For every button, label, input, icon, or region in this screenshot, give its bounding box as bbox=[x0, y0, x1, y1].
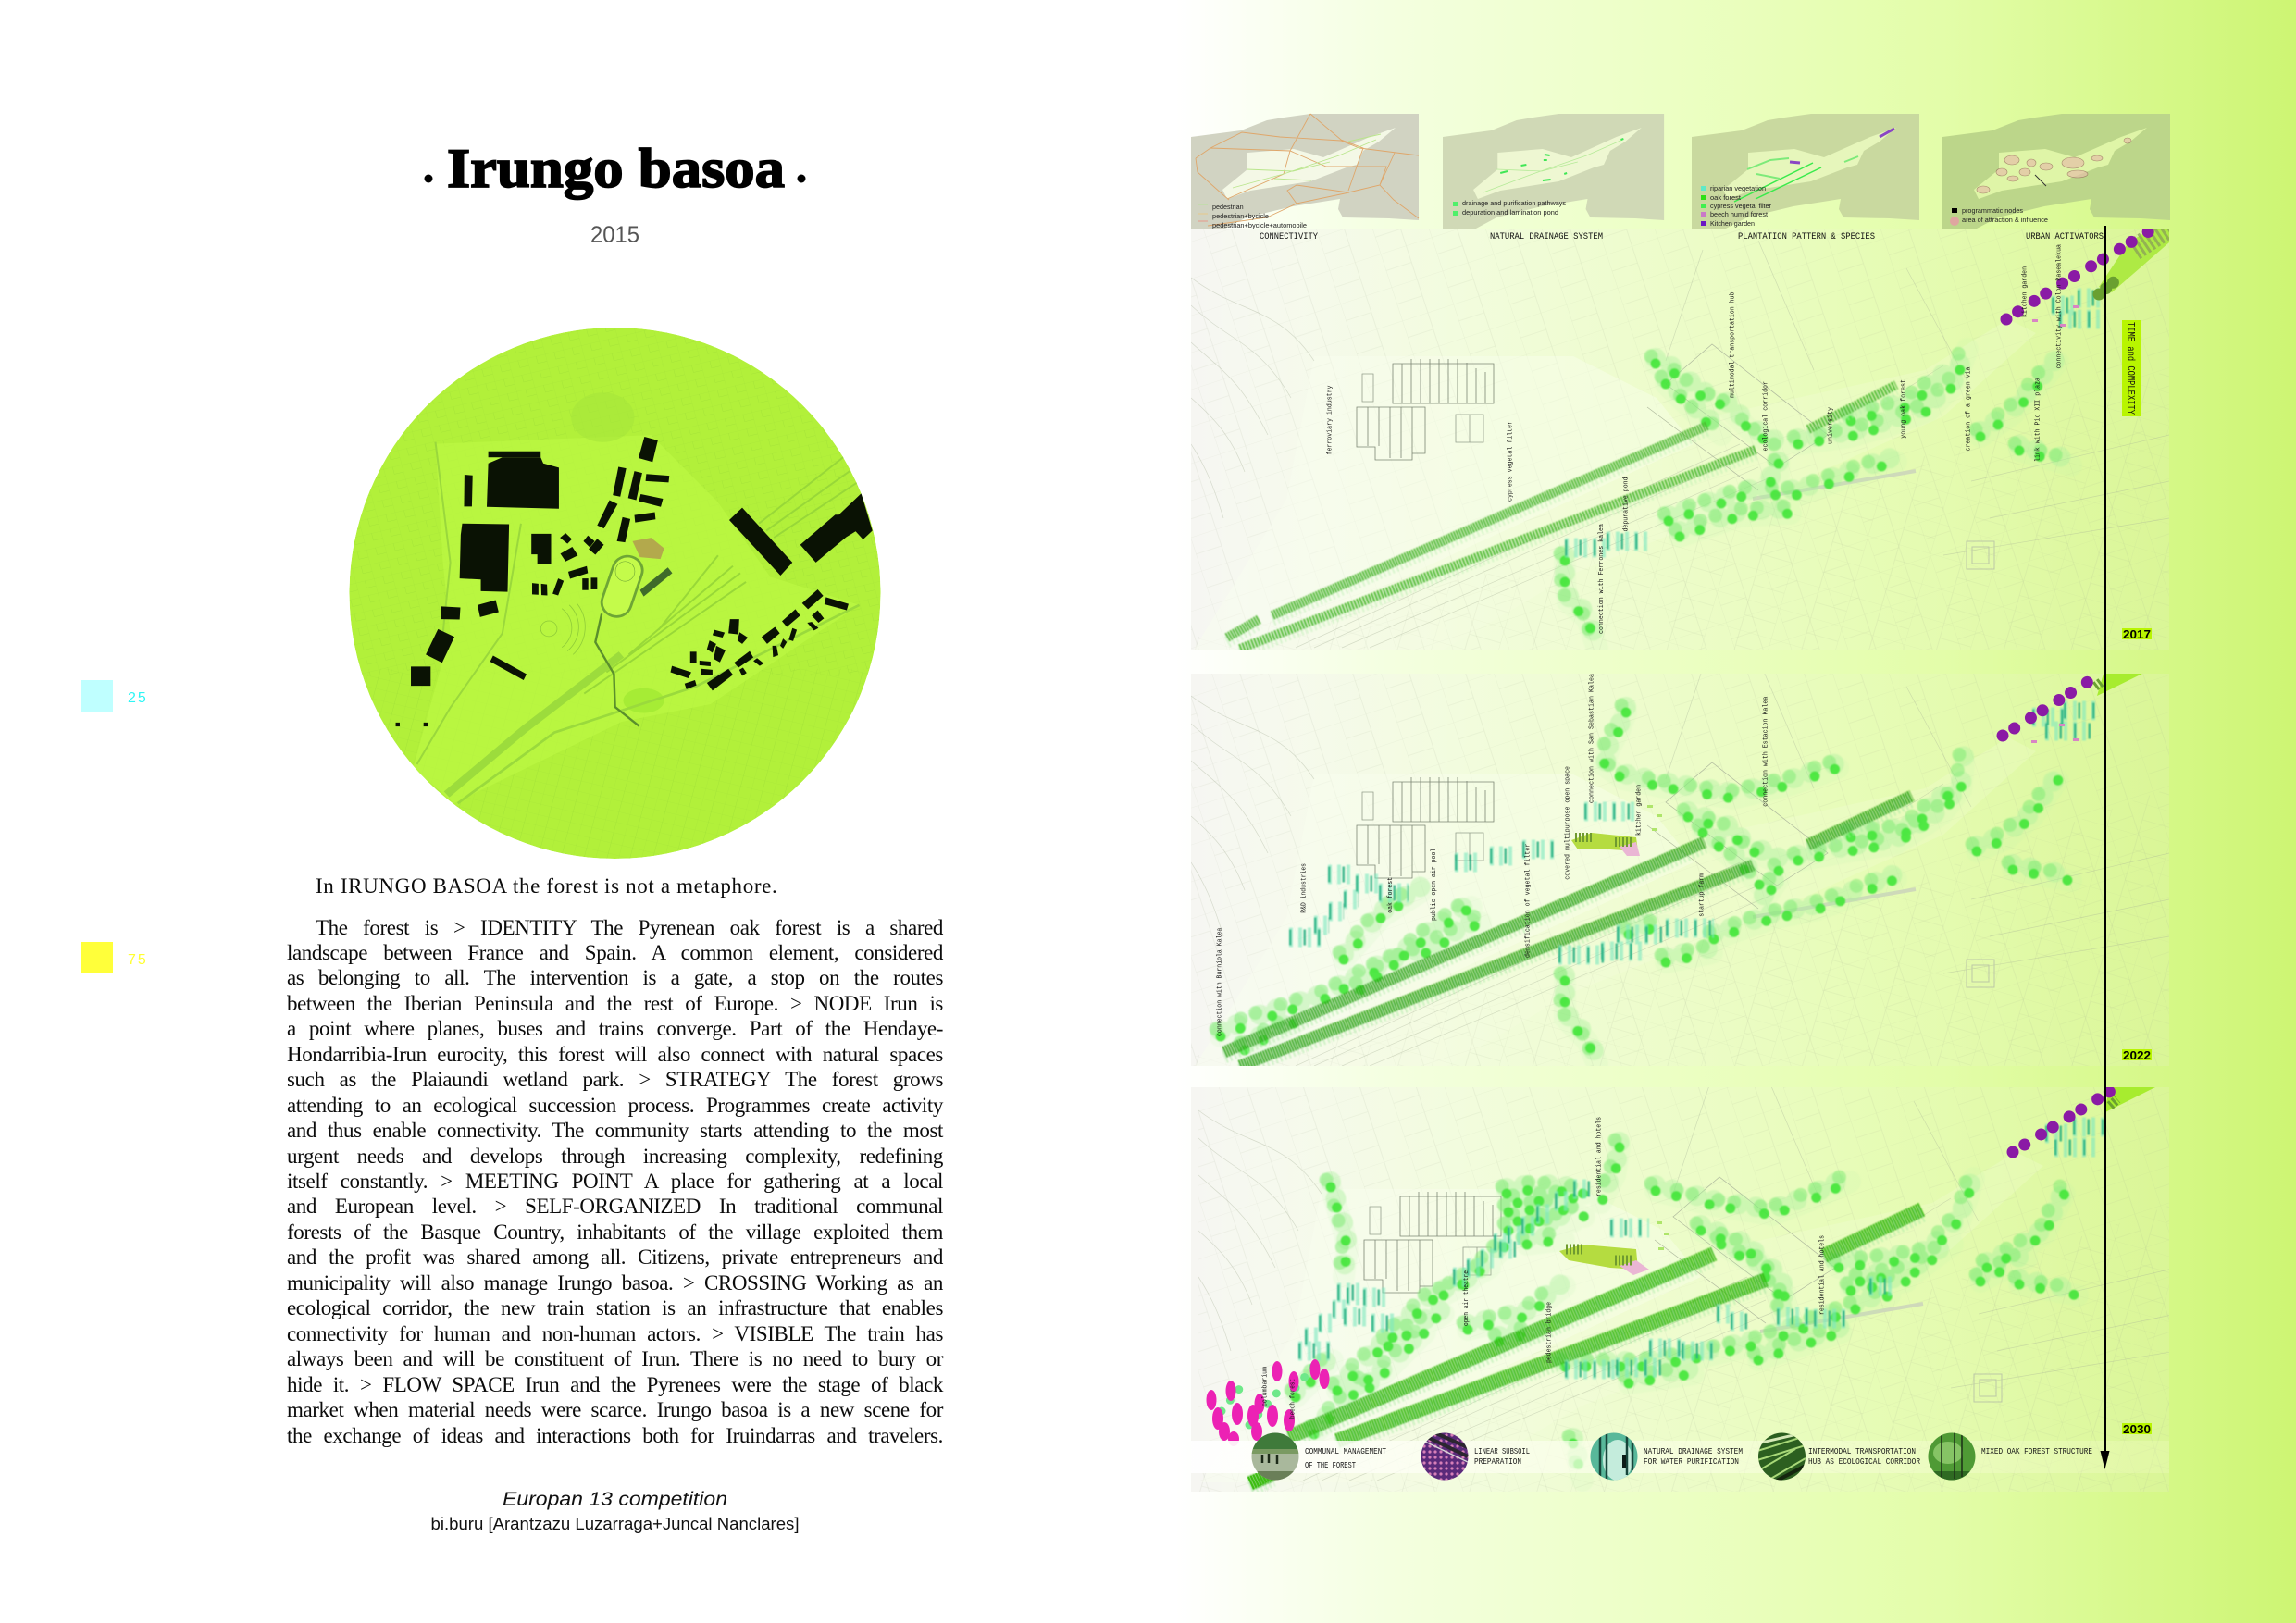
panel: 2022 axonometric map bbox=[1191, 648, 2169, 1083]
labels: 2017 annotations: university bbox=[1827, 407, 1834, 444]
labels: 2022 annotations: kitchen garden bbox=[1636, 785, 1644, 836]
labels: 2017 annotations: young oak forest bbox=[1901, 379, 1908, 439]
body text: and the profit was shared among all. Citizens, private entrepreneurs and bbox=[287, 1245, 943, 1269]
labels: 2030 annotations: open air theatre bbox=[1463, 1270, 1471, 1326]
legend: natural drainage system for water purification: NATURAL DRAINAGE SYSTEM bbox=[1644, 1447, 1743, 1456]
labels: 2017 annotations: ecological corridor bbox=[1762, 381, 1769, 452]
thumbnail heading: connectivity: CONNECTIVITY bbox=[1260, 232, 1318, 242]
labels: 2030 annotations bbox=[1262, 1117, 1827, 1419]
legend: communal management of the forest: COMMUNAL MANAGEMENT bbox=[1305, 1447, 1387, 1456]
labels: 2030 annotations: residential and hotels bbox=[1595, 1117, 1603, 1196]
panel: 2030 axonometric map bbox=[1191, 1062, 2177, 1497]
labels: 2022 annotations: startup farm bbox=[1699, 873, 1706, 917]
title: Irungo basoa bbox=[447, 138, 785, 199]
thumbnail map: connectivity: pedestrian+bycicle+automobile bbox=[1212, 221, 1307, 229]
body text: such as the Plaiaundi wetland park. > STRATEGY The forest grows bbox=[287, 1068, 943, 1091]
legend: communal management of the forest bbox=[1251, 1432, 1387, 1481]
thumbnail map: urban activators: programmatic nodes bbox=[1962, 206, 2023, 215]
thumbnail map: connectivity: pedestrian+bycicle bbox=[1212, 212, 1269, 220]
thumbnail map: connectivity bbox=[1191, 114, 1419, 229]
labels: 2017 annotations: connectivity with Colon Pasealekua bbox=[2056, 244, 2064, 368]
timeline caption: time and complexity: TIME and COMPLEXITY bbox=[2125, 322, 2136, 415]
year label 2030: 2030 bbox=[2123, 1422, 2151, 1436]
year subtitle: 2015 bbox=[590, 222, 639, 248]
labels: 2022 annotations bbox=[1216, 674, 1769, 1036]
legend: linear subsoil preparation: PREPARATION bbox=[1474, 1457, 1521, 1467]
legend: linear subsoil preparation: LINEAR SUBSOIL bbox=[1474, 1447, 1530, 1456]
body text: In IRUNGO BASOA the forest is not a metaphore. bbox=[316, 874, 777, 898]
labels: 2022 annotations: public open air pool bbox=[1431, 848, 1438, 921]
thumbnail map: plantation pattern and species bbox=[1692, 114, 1919, 229]
labels: 2017 annotations: ferroviary industry bbox=[1327, 385, 1334, 455]
legend: intermodal transportation hub: HUB AS ECOLOGICAL CORRIDOR bbox=[1808, 1457, 1921, 1467]
thumbnail map: natural drainage system: drainage and purification pathways bbox=[1462, 199, 1566, 207]
thumbnail heading: plantation pattern: PLANTATION PATTERN & SPECIES bbox=[1738, 232, 1875, 242]
labels: 2022 annotations: connection with San Sebastian Kalea bbox=[1588, 674, 1595, 803]
thumbnail map: urban activators bbox=[1942, 114, 2170, 229]
labels: 2017 annotations: cypress vegetal filter bbox=[1507, 421, 1514, 502]
body text: ecological corridor, the new train station is an infrastructure that enables bbox=[287, 1296, 943, 1319]
year label 2017: 2017 bbox=[2123, 627, 2151, 641]
body text: hide it. > FLOW SPACE Irun and the Pyrenees were the stage of black bbox=[287, 1373, 943, 1396]
thumbnail heading: natural drainage system: NATURAL DRAINAGE SYSTEM bbox=[1490, 232, 1603, 242]
credit: authors: bi.buru [Arantzazu Luzarraga+Juncal Nanclares] bbox=[431, 1515, 800, 1533]
body text: connectivity for human and non-human actors. > VISIBLE The train has bbox=[287, 1322, 943, 1345]
labels: 2030 annotations: beech forest bbox=[1290, 1379, 1297, 1419]
body text: and European level. > SELF-ORGANIZED In traditional communal bbox=[287, 1195, 943, 1218]
labels: 2022 annotations: connection with Estacion Kalea bbox=[1762, 696, 1769, 807]
body text: a point where planes, buses and trains converge. Part of the Hendaye- bbox=[287, 1017, 943, 1040]
labels: 2022 annotations: oak forest bbox=[1387, 877, 1395, 913]
body text: landscape between France and Spain. A common element, considered bbox=[287, 941, 943, 964]
thumbnail map: connectivity: pedestrian bbox=[1212, 203, 1244, 211]
legend: intermodal transportation hub: INTERMODAL TRANSPORTATION bbox=[1808, 1447, 1916, 1456]
labels: 2030 annotations: columbarium bbox=[1262, 1367, 1270, 1406]
thumbnail map: urban activators: area of attraction & influence bbox=[1962, 216, 2048, 224]
thumbnail map: plantation pattern and species: cypress vegetal filter bbox=[1710, 202, 1772, 210]
body text: forests of the Basque Country, inhabitants of the village exploited them bbox=[287, 1220, 943, 1244]
body text: market when material needs were scarce. Irungo basoa is a new scene for bbox=[287, 1398, 943, 1421]
labels: 2017 annotations: multimodal transportation hub bbox=[1729, 292, 1736, 398]
year label 2022: 2022 bbox=[2123, 1048, 2151, 1062]
body text: always been and will be constituent of Irun. There is no need to bury or bbox=[287, 1347, 943, 1370]
thumbnail map: natural drainage system bbox=[1443, 114, 1664, 229]
body text: urgent needs and develops through increasing complexity, redefining bbox=[287, 1145, 943, 1168]
panel: 2017 axonometric map bbox=[1191, 218, 2169, 664]
labels: 2017 annotations: creation of a green via bbox=[1966, 366, 1973, 452]
body text: as belonging to all. The intervention is a gate, a stop on the routes bbox=[287, 966, 943, 989]
thumbnail map: natural drainage system: depuration and lamination pond bbox=[1462, 208, 1558, 217]
legend: communal management of the forest: OF THE FOREST bbox=[1305, 1461, 1356, 1470]
legend swatch: cyan 25: 25 bbox=[128, 690, 148, 706]
labels: 2022 annotations: connection with Burniola Kalea bbox=[1216, 927, 1223, 1036]
legend: intermodal transportation hub bbox=[1757, 1432, 1921, 1481]
labels: 2017 annotations bbox=[1327, 244, 2064, 634]
credit: competition: Europan 13 competition bbox=[503, 1488, 727, 1510]
body text: municipality will also manage Irungo basoa. > CROSSING Working as an bbox=[287, 1271, 943, 1295]
body text: between the Iberian Peninsula and the rest of Europe. > NODE Irun is bbox=[287, 992, 943, 1015]
labels: 2022 annotations: densification of vegetal filter bbox=[1525, 844, 1533, 958]
body text bbox=[287, 874, 944, 1447]
legend swatch: cyan 25 bbox=[81, 680, 148, 712]
body text: The forest is > IDENTITY The Pyrenean oak forest is a shared bbox=[316, 916, 943, 938]
body text: itself constantly. > MEETING POINT A place for gathering at a local bbox=[287, 1170, 943, 1193]
body text: attending to an ecological succession process. Programmes create activity bbox=[287, 1094, 943, 1117]
labels: 2017 annotations: connection with Ferrones kalea bbox=[1598, 524, 1606, 634]
thumbnail heading: urban activators: URBAN ACTIVATORS bbox=[2026, 232, 2104, 242]
labels: 2017 annotations: depurative pond bbox=[1623, 477, 1631, 531]
legend swatch: yellow 75: 75 bbox=[128, 952, 148, 968]
labels: 2017 annotations: kitchen garden bbox=[2021, 266, 2029, 317]
timeline caption: time and complexity bbox=[2122, 320, 2141, 416]
legend: mixed oak forest structure bbox=[1928, 1432, 2092, 1481]
labels: 2022 annotations: covered multipurpose open space bbox=[1564, 766, 1571, 880]
thumbnail map: plantation pattern and species: riparian vegetation bbox=[1710, 184, 1766, 192]
thumbnail map: plantation pattern and species: beech humid forest bbox=[1710, 210, 1768, 218]
body text: the exchange of ideas and interactions both for Iruindarras and travelers. bbox=[287, 1424, 943, 1447]
legend: mixed oak forest structure: MIXED OAK FOREST STRUCTURE bbox=[1981, 1447, 2092, 1456]
thumbnail map: plantation pattern and species: oak forest bbox=[1710, 193, 1741, 202]
circular site plan bbox=[346, 322, 889, 867]
legend: natural drainage system for water purification bbox=[1590, 1432, 1743, 1481]
legend: linear subsoil preparation bbox=[1421, 1431, 1530, 1481]
thumbnail map: plantation pattern and species: Kitchen garden bbox=[1710, 219, 1755, 228]
body text: and thus enable connectivity. The community starts attending to the most bbox=[287, 1119, 943, 1142]
labels: 2022 annotations: R&D industries bbox=[1301, 863, 1309, 913]
labels: 2017 annotations: link with Pio XII plaza bbox=[2034, 378, 2042, 462]
body text: Hondarribia-Irun eurocity, this forest will also connect with natural spaces bbox=[287, 1043, 943, 1066]
legend swatch: yellow 75 bbox=[81, 942, 148, 973]
labels: 2030 annotations: residential and hotels bbox=[1819, 1235, 1827, 1315]
labels: 2030 annotations: pedestrian bridge bbox=[1545, 1302, 1553, 1363]
timeline arrow bbox=[2101, 226, 2110, 1469]
legend: natural drainage system for water purification: FOR WATER PURIFICATION bbox=[1644, 1457, 1739, 1467]
